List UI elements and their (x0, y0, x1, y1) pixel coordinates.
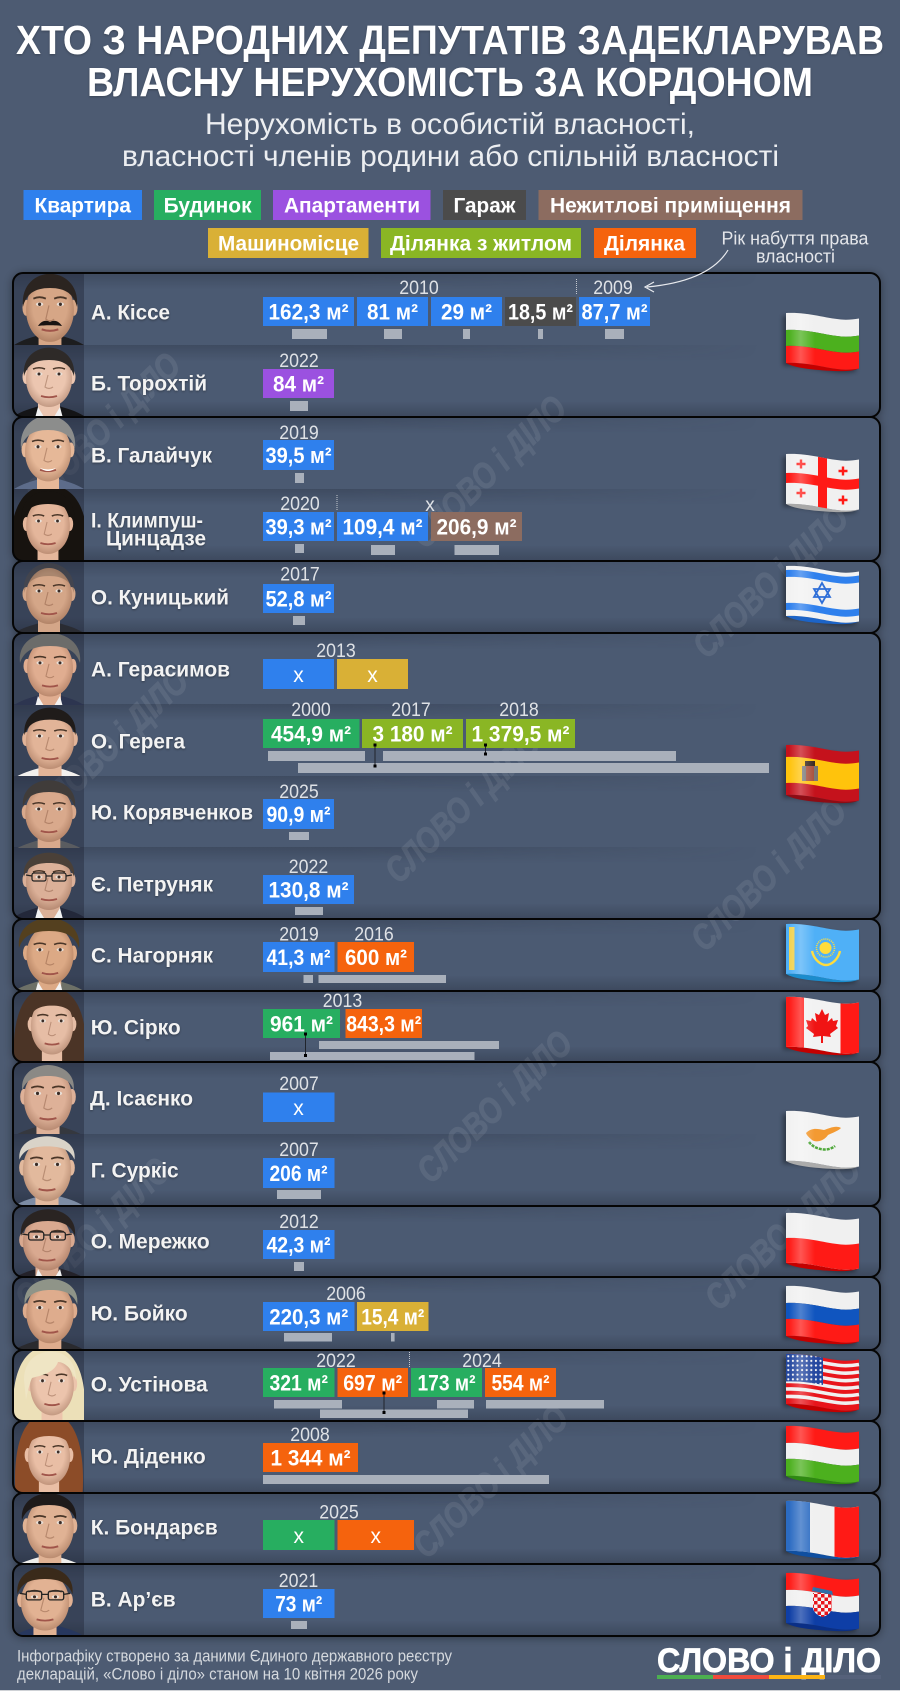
row: Є. Петруняк: 130,8 м² (268, 878, 348, 902)
row: О. Устінова (91, 1351, 604, 1418)
row: Ю. Діденко (91, 1425, 549, 1484)
legend: Квартира (34, 194, 132, 218)
row: О. Куницький: О. Куницький (91, 586, 229, 610)
row: В. Галайчук: 2019 (279, 423, 319, 444)
flag: Russia (783, 1284, 859, 1346)
row: Г. Суркіс: Г. Суркіс (91, 1160, 179, 1182)
flag: Spain (783, 743, 859, 805)
flag: Bulgaria (783, 311, 859, 373)
row: А. Кіссе: 2009 (593, 278, 633, 299)
legend: Ділянка (604, 232, 686, 256)
row: В. Галайчук: В. Галайчук (91, 444, 212, 468)
arrow: to year label (645, 250, 728, 292)
row: О. Устінова: 321 м² (269, 1370, 328, 1396)
subtitle: власності членів родини або спільній власності (122, 140, 779, 173)
row: О. Мережко: 42,3 м² (266, 1232, 330, 1258)
row: О. Мережко (91, 1212, 334, 1271)
row: Ю. Бойко (91, 1284, 428, 1342)
row: С. Нагорняк: С. Нагорняк (91, 944, 213, 968)
row: О. Герега: 2017 (391, 700, 431, 721)
legend: Апартаменти (284, 194, 420, 218)
note: year of ownership (722, 228, 869, 266)
row: І. Климпуш-Цинцадзе: 109,4 м² (342, 514, 422, 540)
row: В. Ар'єв: 73 м² (275, 1592, 322, 1616)
row: О. Герега (91, 700, 769, 773)
photo: О. Устінова (14, 1351, 84, 1420)
row: Г. Суркіс: 2007 (279, 1140, 319, 1161)
photo: Д. Ісаєнко (18, 1065, 80, 1134)
watermarks: СЛОВО і ДІЛО (408, 1022, 580, 1191)
row: Ю. Сірко: 843,3 м² (346, 1012, 421, 1036)
row: О. Герега: 3 180 м² (372, 722, 452, 746)
row: Д. Ісаєнко: х (293, 1097, 304, 1120)
row: В. Ар'єв: В. Ар’єв (91, 1588, 176, 1612)
row: К. Бондарєв: К. Бондарєв (91, 1516, 218, 1540)
panel outlines (13, 273, 880, 1636)
row: І. Климпуш-Цинцадзе: 2020 (280, 494, 320, 515)
row: О. Устінова: 2024 (462, 1351, 502, 1372)
row: Д. Ісаєнко: 2007 (279, 1074, 319, 1095)
row: В. Ар'єв (91, 1571, 334, 1629)
row: І. Климпуш-Цинцадзе: 206,9 м² (436, 514, 516, 540)
row: В. Ар'єв: 2021 (279, 1571, 318, 1592)
flag: Cyprus (783, 1109, 859, 1171)
row: А. Герасимов: 2013 (316, 641, 356, 662)
row: В. Галайчук (91, 423, 334, 483)
row: В. Галайчук: 39,5 м² (266, 443, 332, 468)
row: О. Мережко: О. Мережко (91, 1230, 210, 1254)
row: О. Герега: 2000 (291, 700, 331, 721)
photo: Є. Петруняк (17, 852, 84, 918)
legend: Нежитлові приміщення (550, 194, 791, 218)
flag: Israel (783, 564, 859, 626)
row: О. Устінова: 697 м² (343, 1370, 402, 1396)
row: Є. Петруняк: Є. Петруняк (91, 874, 213, 896)
row: І. Климпуш-Цинцадзе: х (425, 495, 435, 516)
logo: СЛОВО і ДІЛО (657, 1642, 881, 1680)
row: К. Бондарєв (91, 1502, 414, 1550)
legend: Будинок (164, 194, 252, 218)
watermarks: СЛОВО і ДІЛО (16, 344, 188, 513)
row: Б. Торохтій: Б. Торохтій (91, 372, 207, 396)
row: А. Герасимов: А. Герасимов (91, 658, 230, 682)
row: Ю. Діденко: 2008 (290, 1425, 330, 1446)
row: А. Кіссе: 29 м² (441, 300, 492, 324)
row: Г. Суркіс: 206 м² (270, 1161, 328, 1186)
row: Ю. Корявченков (91, 782, 334, 840)
row: О. Куницький (91, 564, 334, 625)
row: А. Кіссе: 81 м² (367, 300, 418, 324)
row: А. Кіссе: 162,3 м² (268, 300, 348, 324)
legend: Ділянка з житлом (390, 232, 572, 256)
row: А. Герасимов: х (367, 664, 378, 687)
subtitle (122, 108, 779, 173)
row: О. Устінова: 554 м² (492, 1370, 550, 1396)
row: Є. Петруняк (91, 857, 354, 915)
photo: Ю. Корявченков (18, 780, 80, 848)
note: year of ownership: Рік набуття права (722, 228, 869, 248)
photo: О. Куницький (18, 563, 82, 632)
row: О. Устінова: О. Устінова (91, 1374, 208, 1396)
photo: А. Кіссе (14, 274, 84, 345)
row: С. Нагорняк (91, 924, 446, 983)
row: О. Куницький: 52,8 м² (266, 586, 332, 612)
row: Б. Торохтій: 84 м² (273, 372, 324, 396)
footer note (17, 1648, 453, 1684)
row: А. Герасимов: х (293, 664, 304, 687)
photo: А. Герасимов (16, 634, 82, 705)
row: С. Нагорняк: 41,3 м² (266, 945, 330, 970)
photo: К. Бондарєв (22, 1494, 78, 1563)
legend (24, 190, 802, 258)
footer note: Інфографіку створено за даними Єдиного державного реєстру (17, 1648, 453, 1666)
photo column (14, 274, 84, 1635)
row: О. Куницький: 2017 (280, 564, 320, 586)
row: Ю. Корявченков: Ю. Корявченков (91, 802, 253, 824)
row: О. Герега: 454,9 м² (271, 722, 351, 746)
row: О. Мережко: 2012 (279, 1212, 319, 1233)
row: Є. Петруняк: 2022 (289, 857, 328, 878)
row: Ю. Сірко: 2013 (323, 991, 362, 1012)
photo: О. Мережко (19, 1209, 80, 1276)
row: С. Нагорняк: 2016 (354, 924, 394, 946)
flag: USA (783, 1352, 859, 1414)
photo: О. Герега (18, 708, 80, 776)
row: І. Климпуш-Цинцадзе: 39,3 м² (266, 514, 332, 540)
row: А. Кіссе: 87,7 м² (582, 300, 648, 324)
row: Ю. Сірко: Ю. Сірко (91, 1016, 181, 1040)
row: Ю. Сірко (91, 991, 499, 1060)
subtitle: Нерухомість в особистій власності, (205, 108, 695, 141)
row: К. Бондарєв: 2025 (319, 1502, 359, 1524)
photo: Б. Торохтій (18, 348, 84, 416)
row: О. Устінова: 173 м² (418, 1370, 476, 1396)
row: Ю. Корявченков: 2025 (279, 782, 319, 803)
row: І. Климпуш-Цинцадзе: І. Климпуш- (91, 510, 203, 532)
row: О. Устінова: 2022 (316, 1351, 356, 1372)
note: year of ownership: власності (756, 246, 835, 266)
row: Ю. Бойко: 220,3 м² (269, 1304, 348, 1330)
flag: Kazakhstan (783, 922, 859, 984)
row: Ю. Сірко: 961 м² (270, 1012, 333, 1036)
watermarks: СЛОВО і ДІЛО (404, 1397, 576, 1566)
watermarks: СЛОВО і ДІЛО (24, 660, 196, 829)
photo: Ю. Діденко (15, 1422, 83, 1492)
row: Г. Суркіс (91, 1140, 334, 1199)
photo: С. Нагорняк (18, 920, 82, 990)
row: С. Нагорняк: 600 м² (345, 945, 407, 970)
row: К. Бондарєв: х (370, 1525, 381, 1548)
watermarks: СЛОВО і ДІЛО (684, 497, 856, 666)
title (16, 17, 884, 105)
row: Ю. Діденко: 1 344 м² (270, 1446, 350, 1470)
flag: Poland (783, 1211, 859, 1273)
row: О. Герега: 2018 (499, 700, 539, 721)
row: О. Герега: О. Герега (91, 730, 185, 754)
photo: Ю. Бойко (18, 1279, 82, 1349)
row: С. Нагорняк: 2019 (279, 924, 319, 946)
row: Ю. Діденко: Ю. Діденко (91, 1446, 206, 1468)
row: А. Кіссе: 2010 (399, 278, 439, 299)
flag: France (783, 1499, 860, 1561)
flag: Canada (783, 995, 860, 1057)
flag: Hungary (783, 1424, 859, 1486)
watermarks (6, 344, 868, 1566)
row: Ю. Корявченков: 90,9 м² (266, 802, 330, 827)
flag: Georgia (783, 452, 859, 514)
watermarks: СЛОВО і ДІЛО (402, 387, 574, 556)
row: І. Климпуш-Цинцадзе: Цинцадзе (106, 528, 206, 550)
row: Ю. Бойко: 15,4 м² (361, 1304, 424, 1330)
row: Ю. Бойко: Ю. Бойко (91, 1302, 188, 1326)
watermarks: СЛОВО і ДІЛО (6, 1149, 178, 1318)
row: Д. Ісаєнко (90, 1074, 334, 1122)
row: Д. Ісаєнко: Д. Ісаєнко (90, 1088, 193, 1110)
photo: Ю. Сірко (14, 992, 84, 1061)
photo: В. Галайчук (14, 418, 84, 489)
row: А. Кіссе: 18,5 м² (508, 300, 573, 324)
row: І. Климпуш-Цинцадзе (91, 494, 522, 555)
photo: В. Ар'єв (17, 1567, 82, 1635)
photo: І. Климпуш-Цинцадзе (14, 489, 84, 560)
row: А. Кіссе (91, 278, 650, 339)
panel backgrounds (13, 273, 880, 1636)
watermarks: СЛОВО і ДІЛО (376, 722, 548, 891)
footer note: декларацій, «Слово і діло» станом на 10 квітня 2026 року (17, 1666, 419, 1684)
legend: Машиномісце (218, 232, 359, 256)
photo: Г. Суркіс (18, 1136, 82, 1205)
row: А. Кіссе: А. Кіссе (91, 302, 170, 324)
row: Б. Торохтій (91, 351, 334, 411)
legend: Гараж (454, 194, 516, 218)
row: Ю. Бойко: 2006 (326, 1284, 366, 1305)
title: ВЛАСНУ НЕРУХОМІСТЬ ЗА КОРДОНОМ (87, 59, 813, 105)
row: К. Бондарєв: х (293, 1525, 304, 1548)
row: Б. Торохтій: 2022 (279, 351, 319, 372)
watermarks: СЛОВО і ДІЛО (682, 790, 854, 959)
row: А. Герасимов (91, 641, 408, 689)
watermarks: СЛОВО і ДІЛО (696, 1149, 868, 1318)
flag: Croatia (783, 1571, 859, 1633)
row: О. Герега: 1 379,5 м² (472, 722, 570, 746)
